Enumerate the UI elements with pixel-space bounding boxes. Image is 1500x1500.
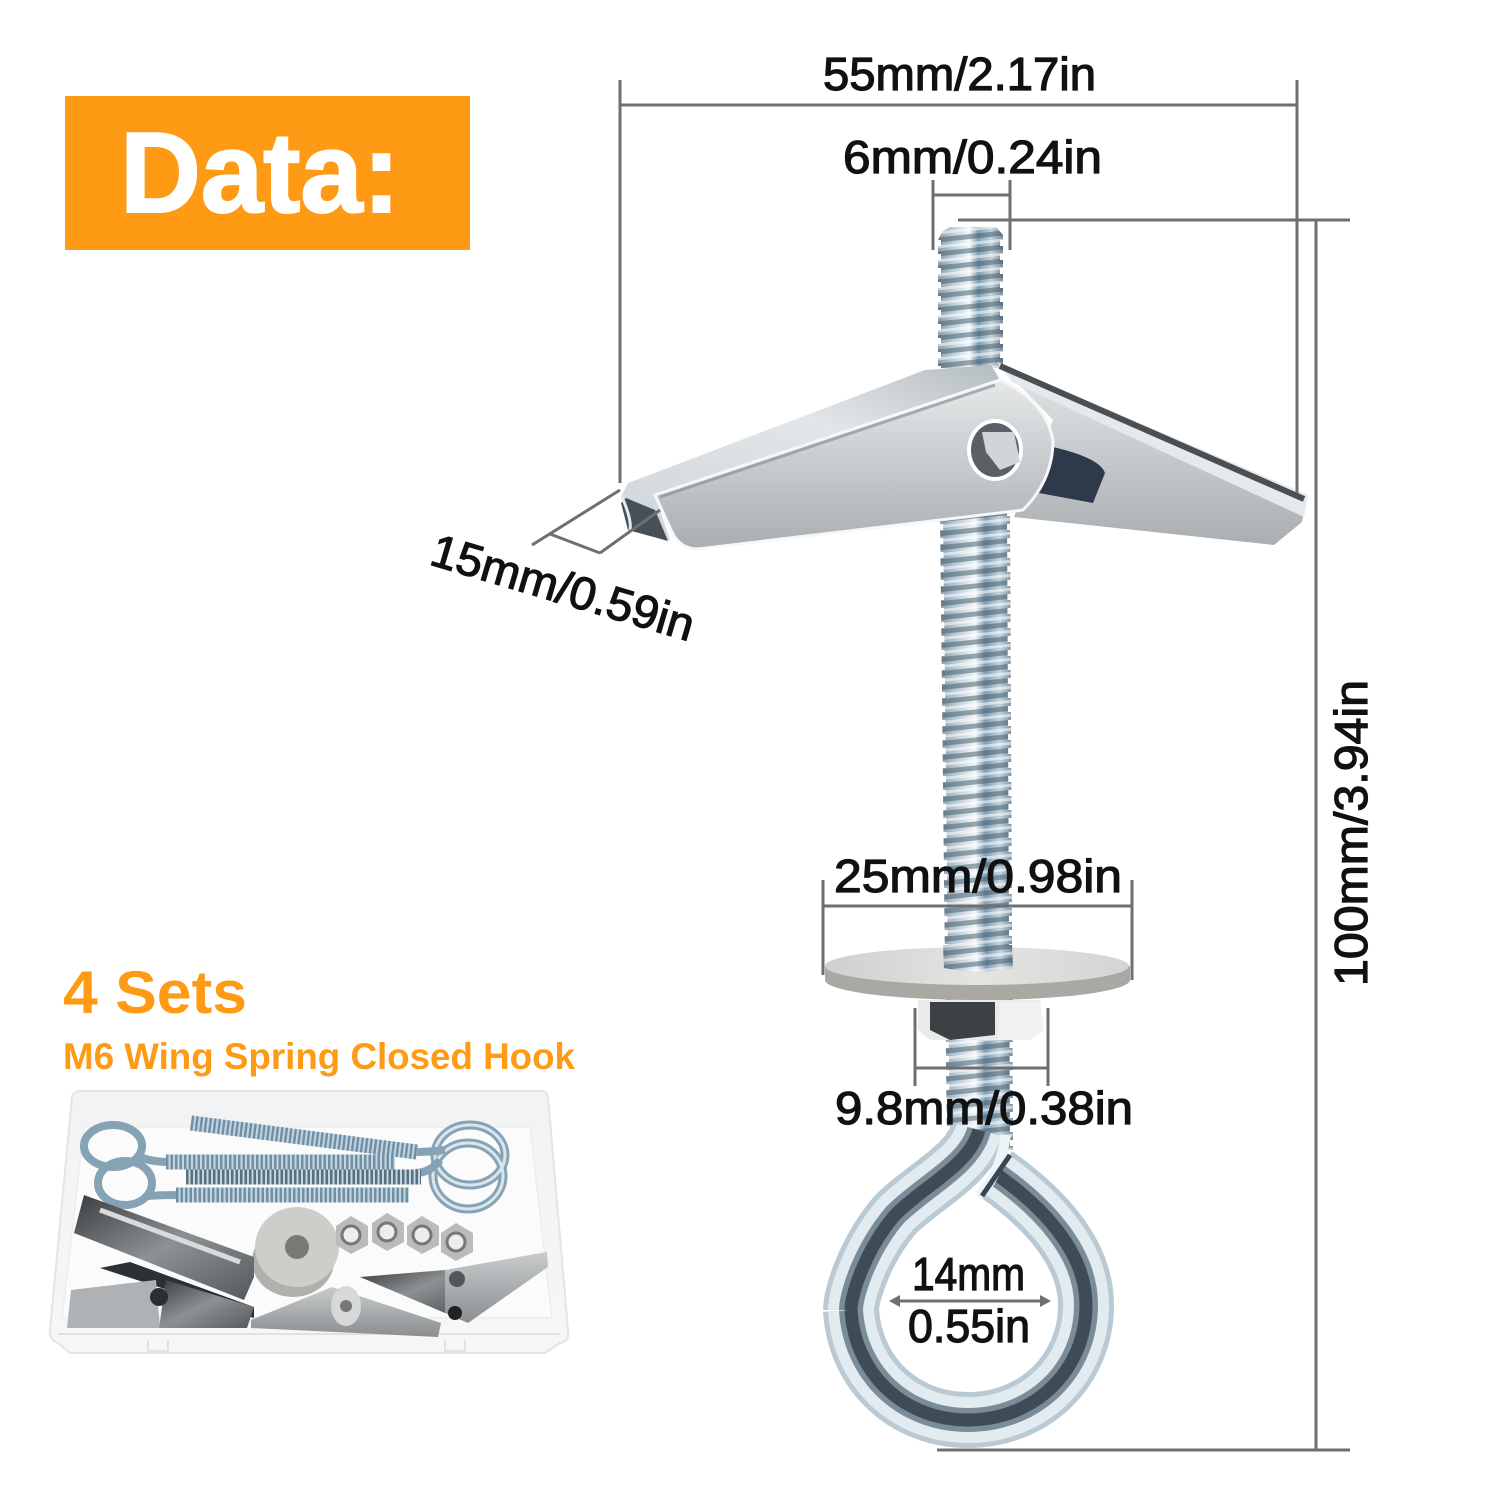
dimension label: nut width: 9.8mm/0.38in bbox=[835, 1082, 1133, 1134]
wing left bbox=[621, 365, 1053, 549]
dimension label: thread diameter: 6mm/0.24in bbox=[843, 131, 1102, 183]
title badge: Data: Data: bbox=[120, 110, 400, 237]
washer bbox=[825, 945, 1130, 1000]
heading: 4 Sets: 4 Sets bbox=[63, 959, 247, 1026]
washers bbox=[252, 1207, 339, 1297]
nut bbox=[918, 1000, 1044, 1040]
dimension label: overall width: 55mm/2.17in bbox=[823, 48, 1096, 100]
dimension label: washer diameter: 25mm/0.98in bbox=[834, 850, 1122, 902]
nuts bbox=[336, 1213, 473, 1261]
title badge: Data bbox=[65, 96, 470, 250]
product photo: kit in clear box bbox=[50, 1091, 568, 1353]
dimension label: eye diameter metric: 14mm bbox=[912, 1248, 1025, 1300]
dimension label: eye diameter imperial: 0.55in bbox=[908, 1300, 1030, 1352]
dimension label: wing width: 15mm/0.59in bbox=[425, 524, 701, 651]
dimension arrow: 14mm inner diameter bbox=[889, 1295, 1051, 1307]
product photo: toggle bolt bbox=[621, 227, 1308, 1420]
dimension label: total length: 100mm/3.94in bbox=[1325, 680, 1377, 986]
eye bolts bbox=[84, 1123, 505, 1209]
threaded shaft bbox=[938, 227, 1013, 1150]
spring wings bbox=[67, 1195, 548, 1337]
dimension lines bbox=[532, 80, 1350, 1450]
eye hook bbox=[851, 1130, 1086, 1420]
subheading: M6 Wing Spring Closed Hook: M6 Wing Spring Closed Hook bbox=[63, 1036, 575, 1077]
wing right bbox=[997, 362, 1308, 545]
